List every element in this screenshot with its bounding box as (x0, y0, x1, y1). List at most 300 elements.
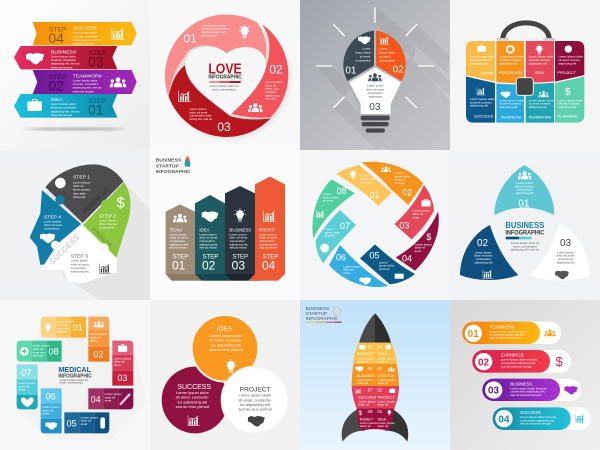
row 02 (472, 350, 571, 373)
quadrant: step 2: FINANCE (90, 227, 112, 249)
segment 01 (336, 165, 392, 206)
row 02: EARNINGS (501, 353, 524, 358)
circle: success: sit amet, consecte- (176, 395, 210, 400)
block 06: Lorem ipsum (42, 405, 60, 409)
section: contact and plan: CONTACT (357, 352, 375, 356)
segment 02: Lorem ipsum (475, 250, 492, 254)
block 07 (17, 364, 38, 409)
row 02: sed do eiusmod tempor (501, 364, 532, 368)
segment 06: dolor sit (343, 268, 354, 272)
cell: planning: sit amet consect (558, 102, 580, 106)
section: business and startup: Lorem ipsum (357, 378, 375, 382)
cell: education: EDUCATION (499, 70, 522, 75)
quadrant: step 1: STEP 1 (73, 175, 90, 181)
circle: idea: sed do eius yomod (209, 347, 243, 352)
arrow: step 02 teamwork: sit amet, consectet (73, 82, 98, 86)
wedge 01: ipsum dolor (356, 51, 371, 55)
arrow: step 02 teamwork: TEAMWORK (73, 73, 103, 79)
block 03 (112, 341, 133, 386)
arrow: step 02 teamwork: Lorem ipsum dolor (73, 78, 97, 82)
segment 02: dolor sit (265, 83, 276, 87)
section: success and project (352, 386, 399, 408)
arrow: business: BUSINESS (229, 227, 251, 232)
section: business and startup: Lorem ipsum (378, 378, 395, 382)
cell: project: Lorem ipsum dolor (558, 55, 583, 59)
cell: success: Lorem ipsum dolor (470, 97, 495, 101)
wedge 01 (343, 31, 374, 81)
quadrant: step 3: consectetur (71, 266, 86, 270)
cell: planning: PLANNING (558, 113, 578, 118)
arrow: step 03 business (14, 46, 117, 69)
block 08: 08 (49, 347, 59, 357)
row 01: 01 (468, 329, 479, 340)
segment 07: ipsum dolor (324, 230, 340, 234)
arrow: step 03 business: STEP (89, 50, 107, 57)
quadrant: step 3: dolor sit amet (71, 262, 89, 266)
segment 02: elit, sed (265, 97, 276, 101)
segment 02: 02 (402, 188, 412, 198)
section: business and startup: STARTUP (378, 374, 395, 378)
row 03: 03 (488, 386, 500, 397)
cell: project: sit amet consect (558, 58, 580, 62)
circle: idea: sit amet, consecte- (209, 338, 243, 343)
row 04: SUCCESS (520, 410, 541, 415)
bulb base (361, 116, 390, 133)
segment 03: 03 (560, 238, 572, 249)
block 04: amet (105, 399, 111, 403)
segment 04: dolor sit (415, 246, 425, 250)
segment 03: consectetur (558, 257, 573, 261)
block 07: dolor sit (18, 384, 29, 388)
section: contact and plan: PLAN (378, 352, 388, 356)
wedge 03: consectetur (368, 91, 383, 95)
block 08: sectetur (33, 354, 43, 358)
arrow: step 03 business: 03 (88, 53, 104, 69)
block 03: Lorem ipsum (114, 356, 131, 360)
rocket fins (342, 408, 408, 442)
cell: learn: Lorem ipsum dolor (470, 55, 495, 59)
circle: project: Lorem ipsum dolor (238, 393, 271, 398)
segment 02: consect (394, 181, 405, 185)
arrow: step 04 success: adipiscing elit, sed do (73, 38, 102, 42)
segment 03: consectetur adip (189, 114, 212, 118)
block 04: Lorem ipsum (105, 392, 122, 396)
segment 01: 01 (183, 31, 197, 45)
segment 07 (316, 210, 356, 263)
quadrant: step 2 (90, 195, 125, 249)
wedge 02: ipsum dolor (379, 51, 395, 55)
segment 08 (312, 179, 355, 238)
panel: pill list (462, 322, 591, 430)
head shadow (45, 187, 150, 300)
section: business and startup: 06 (368, 366, 373, 371)
segment 01: sit amet, consectetur (201, 27, 229, 31)
segment 03: dolor sit (412, 212, 423, 216)
block 05: 05 (67, 418, 77, 428)
block 01 (41, 317, 86, 338)
block 04: dolor sit (105, 395, 115, 399)
section: success and project: Lorem ipsum (378, 400, 395, 404)
rocket nose (359, 313, 391, 343)
arrow: business: STEP (232, 254, 248, 260)
row 03: BUSINESS (510, 381, 532, 386)
title (156, 157, 191, 175)
wedge 03: adipiscing (369, 95, 382, 99)
segment 03: amet (412, 215, 419, 219)
cell: success: adipiscing elit (470, 104, 488, 108)
circle: success: tur adipiscing elit (177, 399, 208, 404)
segment 01: 01 (370, 190, 380, 200)
circle: success: SUCCESS (177, 384, 211, 391)
block 04: 04 (91, 394, 101, 404)
cell: success (466, 76, 495, 123)
wedge 03 (349, 68, 401, 114)
cell: success: SUCCESS (474, 113, 494, 118)
arrow: profit (248, 177, 285, 281)
segment 03: dolor sit amet, (189, 110, 208, 114)
segment 03: Lorem ipsum (557, 250, 574, 254)
segment 01: do eiusmod (201, 33, 217, 37)
block 08: Lorem ipsum (33, 344, 50, 348)
segment 06 (329, 245, 388, 287)
panel: step arrows (14, 22, 137, 130)
cell: project: adipiscing elit (558, 61, 576, 65)
panel: rocket (306, 306, 408, 442)
center title: BUSINESS (505, 221, 545, 230)
cell: idea: IDEA (535, 70, 544, 75)
circle: project (222, 367, 288, 433)
arrow: profit: consectetur (259, 239, 275, 243)
arrow: step 04 success: 04 (48, 30, 64, 46)
arrow: idea: dolor sit amet, (199, 236, 218, 240)
arrow: step 04 success: sit amet, consectet (73, 34, 98, 38)
segment 06: Lorem ipsum (343, 264, 361, 268)
cell: idea: sit amet consect (529, 58, 550, 62)
segment 03: Lorem ipsum (189, 107, 207, 111)
block 02: dolor sit (90, 335, 101, 339)
segment 01 (494, 165, 554, 215)
panel: trefoil cycle (460, 165, 589, 281)
cell: business: Lorem ipsum dolor (499, 98, 524, 102)
section: money and idea: Lorem ipsum (378, 421, 395, 425)
wedge 03: Lorem ipsum (367, 84, 384, 88)
circle: project: sed do eius yomod (238, 407, 272, 412)
heart title (208, 61, 242, 91)
panel: love heart cycle (165, 14, 289, 139)
shadow (25, 128, 125, 130)
wedge 01: consectetur (356, 59, 371, 63)
quadrant: step 2: Lorem ipsum (99, 219, 116, 223)
row 02: 02 (478, 357, 490, 368)
wedge 03: 03 (369, 102, 381, 113)
wedge 02: Lorem (379, 47, 388, 51)
section: success and project: dolor sit (378, 403, 388, 407)
quadrant: step 1: tetur adip- (73, 191, 86, 195)
block 06 (41, 388, 62, 433)
segment 05 (360, 244, 415, 284)
block 06: dolor sit (42, 408, 53, 412)
section: money and idea: dolor sit (378, 424, 388, 428)
heart title: INFOGRAPHIC (208, 75, 242, 81)
block 02 (88, 317, 109, 362)
section: money and idea: 08 (368, 409, 373, 414)
quadrant: step 3: Lorem ipsum (71, 259, 88, 263)
quadrant: step 1: amet consec- (73, 188, 91, 192)
segment 02: Lorem ipsum (265, 80, 283, 84)
block 01: sectetur (57, 330, 67, 334)
quadrant: step 1 (45, 164, 131, 258)
quadrant: step 1: dolor sit (73, 184, 84, 188)
section: business and startup: dolor sit (378, 381, 388, 385)
section: success and project: 02 (377, 387, 383, 392)
segment 01: Lorem ipsum (516, 181, 533, 185)
circle: idea: tur adipiscing elit (211, 342, 242, 347)
wedge 01: 01 (345, 65, 357, 76)
cell: learn (466, 41, 495, 82)
medical shadow (17, 323, 147, 440)
circle: idea: IDEA (217, 326, 233, 333)
block 01: amet con (57, 326, 69, 330)
segment 02: adipis cing (265, 93, 280, 97)
wedge 02: 02 (393, 65, 404, 76)
segment 08: Lorem (323, 192, 331, 196)
row 03: Lorem ipsum dolor sit amet, (510, 386, 547, 390)
arrow: profit: sed do eiusm (259, 246, 278, 250)
arrow: step 01 idea: 01 (88, 102, 104, 118)
arrow: business: 03 (232, 258, 245, 272)
cell: success: sit amet consect (470, 100, 492, 104)
segment 01: sit amet (361, 180, 371, 184)
arrow: idea: 02 (202, 258, 216, 272)
arrow: team: adipiscing elit, (170, 242, 189, 246)
arrow: team: consectetur (170, 239, 185, 243)
segment 02: sectetur (265, 90, 276, 94)
arrow: team: 01 (172, 258, 186, 272)
arrow: idea: sed do eiusm (199, 246, 218, 250)
segment 06: 06 (336, 253, 346, 263)
segment 05: ipsum dolor (379, 264, 394, 268)
quadrant: step 4: dolor sit amet (44, 223, 62, 227)
panel: light bulb (316, 7, 450, 150)
arrow: step 03 business: eiusmod tempor (51, 65, 72, 69)
block 02: Lorem ipsum (90, 332, 107, 336)
segment 02: ipsum dolor (394, 174, 410, 178)
segment 03: adipiscing elit (557, 260, 575, 264)
block 03: 03 (117, 373, 127, 383)
segment 03 (394, 185, 434, 239)
arrow: step 04 success: eiusmod tempor (73, 42, 94, 46)
segment 01: adipiscing elit, sed (201, 30, 226, 34)
row 04: Lorem ipsum dolor sit amet, (520, 415, 557, 419)
arrow: step 03 business: Lorem ipsum dolor (51, 54, 76, 58)
segment 04 (396, 212, 439, 271)
arrow: step 04 success (33, 22, 137, 46)
segment 02: Lorem (394, 171, 403, 175)
arrow: step 01 idea: adipiscing elit, sed do (51, 109, 80, 113)
block 08: amet con (33, 350, 45, 354)
section: success and project: PROJECT (378, 396, 395, 400)
arrow: step 01 idea: STEP (89, 98, 107, 105)
arrow: idea: adipiscing elit, (199, 242, 218, 246)
arrow: step 03 business: BUSINESS (51, 49, 77, 55)
segment 01: ipsum dolor (361, 177, 376, 181)
segment 02: dolor sit amet, (474, 254, 493, 258)
wedge 02 (376, 31, 406, 81)
row 03: sed do eiusmod tempor (510, 393, 542, 397)
cell: learn: adipiscing elit (470, 61, 488, 65)
segment 01: adipiscing elit (515, 191, 533, 195)
center title: Lorem ipsum dolor sit (511, 241, 539, 245)
segment 08: ipsum dolor (323, 195, 338, 199)
section: money and idea: Lorem ipsum (360, 421, 377, 425)
segment 01 (165, 14, 266, 97)
arrow: step 01 idea: Lorem ipsum dolor (51, 102, 76, 106)
section: success and project: dolor sit (359, 403, 369, 407)
section: contact and plan: 04 (377, 345, 383, 350)
segment 03: iscing elit, sed do (189, 117, 213, 121)
section: business and startup: dolor sit (357, 381, 368, 385)
cell: planning: adipiscing elit (558, 105, 576, 109)
segment 07: 07 (340, 221, 350, 231)
block 01: Lorem ipsum (57, 320, 74, 324)
arrow: step 02 teamwork: STEP (49, 74, 67, 81)
quadrant: step 3: STEP 3 (71, 253, 88, 259)
center title: adipiscing elit, sed do (511, 248, 540, 252)
cell: education (496, 41, 524, 83)
cell: idea: adipiscing elit (529, 61, 547, 65)
arrow: business: consectetur (229, 239, 245, 243)
segment 02 (460, 225, 518, 280)
arrow: business: Lorem ipsum (229, 232, 247, 236)
row 01: TEAMWORK (490, 324, 515, 329)
section: money and idea: IDEA (378, 417, 387, 421)
row 04: consectetur adipiscing elit, (520, 418, 555, 422)
bulb light rays (316, 7, 434, 108)
row 02: $ (556, 355, 563, 369)
heart title: LOVE (208, 61, 242, 77)
heart title: amet, consectetur (212, 87, 236, 91)
section: contact and plan: Lorem ipsum (357, 356, 375, 360)
cell: business: BUSINESS (501, 115, 521, 120)
cell: idea: Lorem ipsum dolor (529, 55, 553, 59)
panel: head puzzle (29, 164, 150, 300)
cell: education: sit amet consect (499, 58, 521, 62)
cell: project (555, 41, 584, 82)
block 01: 01 (73, 323, 83, 333)
cell: education: Lorem ipsum dolor (499, 55, 524, 59)
arrow: idea (195, 195, 232, 281)
section: contact and plan: 05 (368, 345, 373, 350)
arrow: profit: Lorem ipsum (259, 232, 277, 236)
arrow: step 04 success: Lorem ipsum dolor (73, 31, 97, 35)
wedge 02: consectetur (379, 59, 395, 63)
cell: idea (526, 41, 554, 83)
arrow: step 01 idea: eiusmod tempor (51, 113, 72, 117)
quadrant: step 4: Lorem ipsum (44, 220, 61, 224)
title: STARTUP (156, 163, 180, 169)
section: money and idea: $ (358, 410, 362, 417)
cell: teamwork: sit amet consect (529, 102, 550, 106)
block 05: dolor sit (81, 419, 91, 423)
quadrant: step 3 (41, 225, 117, 283)
center title (58, 367, 92, 385)
heart title: Lorem ipsum dolor sit (210, 84, 239, 88)
segment 03: Lorem ipsum (412, 209, 430, 213)
wedge 01: sit amet, (360, 55, 371, 59)
segment 03: dolor sit amet, (556, 254, 575, 258)
quadrant: step 2: dolor sit amet (99, 222, 117, 226)
section: business and startup (352, 364, 399, 386)
arrow: business: adipiscing elit, (229, 242, 248, 246)
arrow: step 03 business: sit amet, consectet (51, 58, 76, 62)
row 01: Lorem ipsum dolor sit amet, (490, 329, 526, 333)
section: success and project: 07 (368, 387, 373, 392)
center title (505, 221, 545, 252)
cell: teamwork: TEAMWORK (528, 115, 552, 120)
section: business and startup: BUSINESS (357, 374, 376, 378)
center title: amet, consectetur (59, 381, 83, 385)
arrow: step 02 teamwork: adipiscing elit, sed do (73, 86, 102, 90)
panel: medical cycle (17, 317, 147, 440)
cell: business: sit amet consect (499, 102, 521, 106)
segment 06: amet (343, 271, 350, 275)
cell: business: adipiscing elit (499, 105, 517, 109)
segment 05: Lorem (379, 260, 387, 264)
panel: eight-part circle (312, 162, 439, 287)
segment 02: adipiscing elit (474, 260, 492, 264)
arrow: step 01 idea (14, 94, 117, 118)
block 06: amet (42, 412, 49, 416)
arrow: step 02 teamwork: eiusmod tempor (73, 89, 94, 93)
segment 08: 08 (337, 186, 347, 196)
row 02: Lorem ipsum dolor sit amet, (501, 358, 538, 362)
panel: startup arrows (156, 157, 285, 281)
cell: business (496, 83, 524, 123)
title: BUSINESS (156, 158, 181, 164)
arrow: idea: STEP (203, 254, 218, 260)
arrow: idea: consectetur (199, 239, 215, 243)
arrow: team: STEP (173, 254, 188, 260)
cell: learn: sit amet consect (470, 58, 492, 62)
arrow: profit: dolor sit amet, (259, 236, 278, 240)
wedge 03: dolor sit amet, (366, 87, 385, 91)
block 05 (64, 412, 109, 433)
arrow: step 04 success: SUCCESS (73, 26, 97, 32)
segment 02: 02 (477, 238, 489, 249)
cell: project: PROJECT (557, 70, 576, 75)
cell: planning: Lorem ipsum dolor (558, 98, 583, 102)
section: contact and plan: dolor sit (378, 359, 388, 363)
segment 02 (362, 162, 423, 205)
arrow: team: TEAM (170, 227, 182, 232)
arrow: step 02 teamwork: 02 (48, 78, 64, 94)
section: money and idea: 01 (377, 409, 383, 414)
cell: education: adipiscing elit (499, 61, 517, 65)
title: BUSINESS (306, 306, 329, 311)
segment 07: sit amet (324, 234, 335, 238)
quadrant: step 2: STEP 2 (99, 213, 116, 219)
arrow: team: dolor sit amet, (170, 236, 189, 240)
circle: project: PROJECT (240, 387, 271, 394)
row 04: sed do eiusmod tempor (520, 422, 551, 426)
block 02: 02 (93, 349, 103, 359)
row 01 (462, 322, 561, 344)
block 05: Lorem ipsum (81, 415, 98, 419)
arrow: step 01 idea: IDEA (51, 97, 63, 103)
title: INFOGRAPHIC (306, 316, 339, 321)
segment 07: Lorem (324, 227, 333, 231)
center title: INFOGRAPHIC (505, 230, 544, 237)
